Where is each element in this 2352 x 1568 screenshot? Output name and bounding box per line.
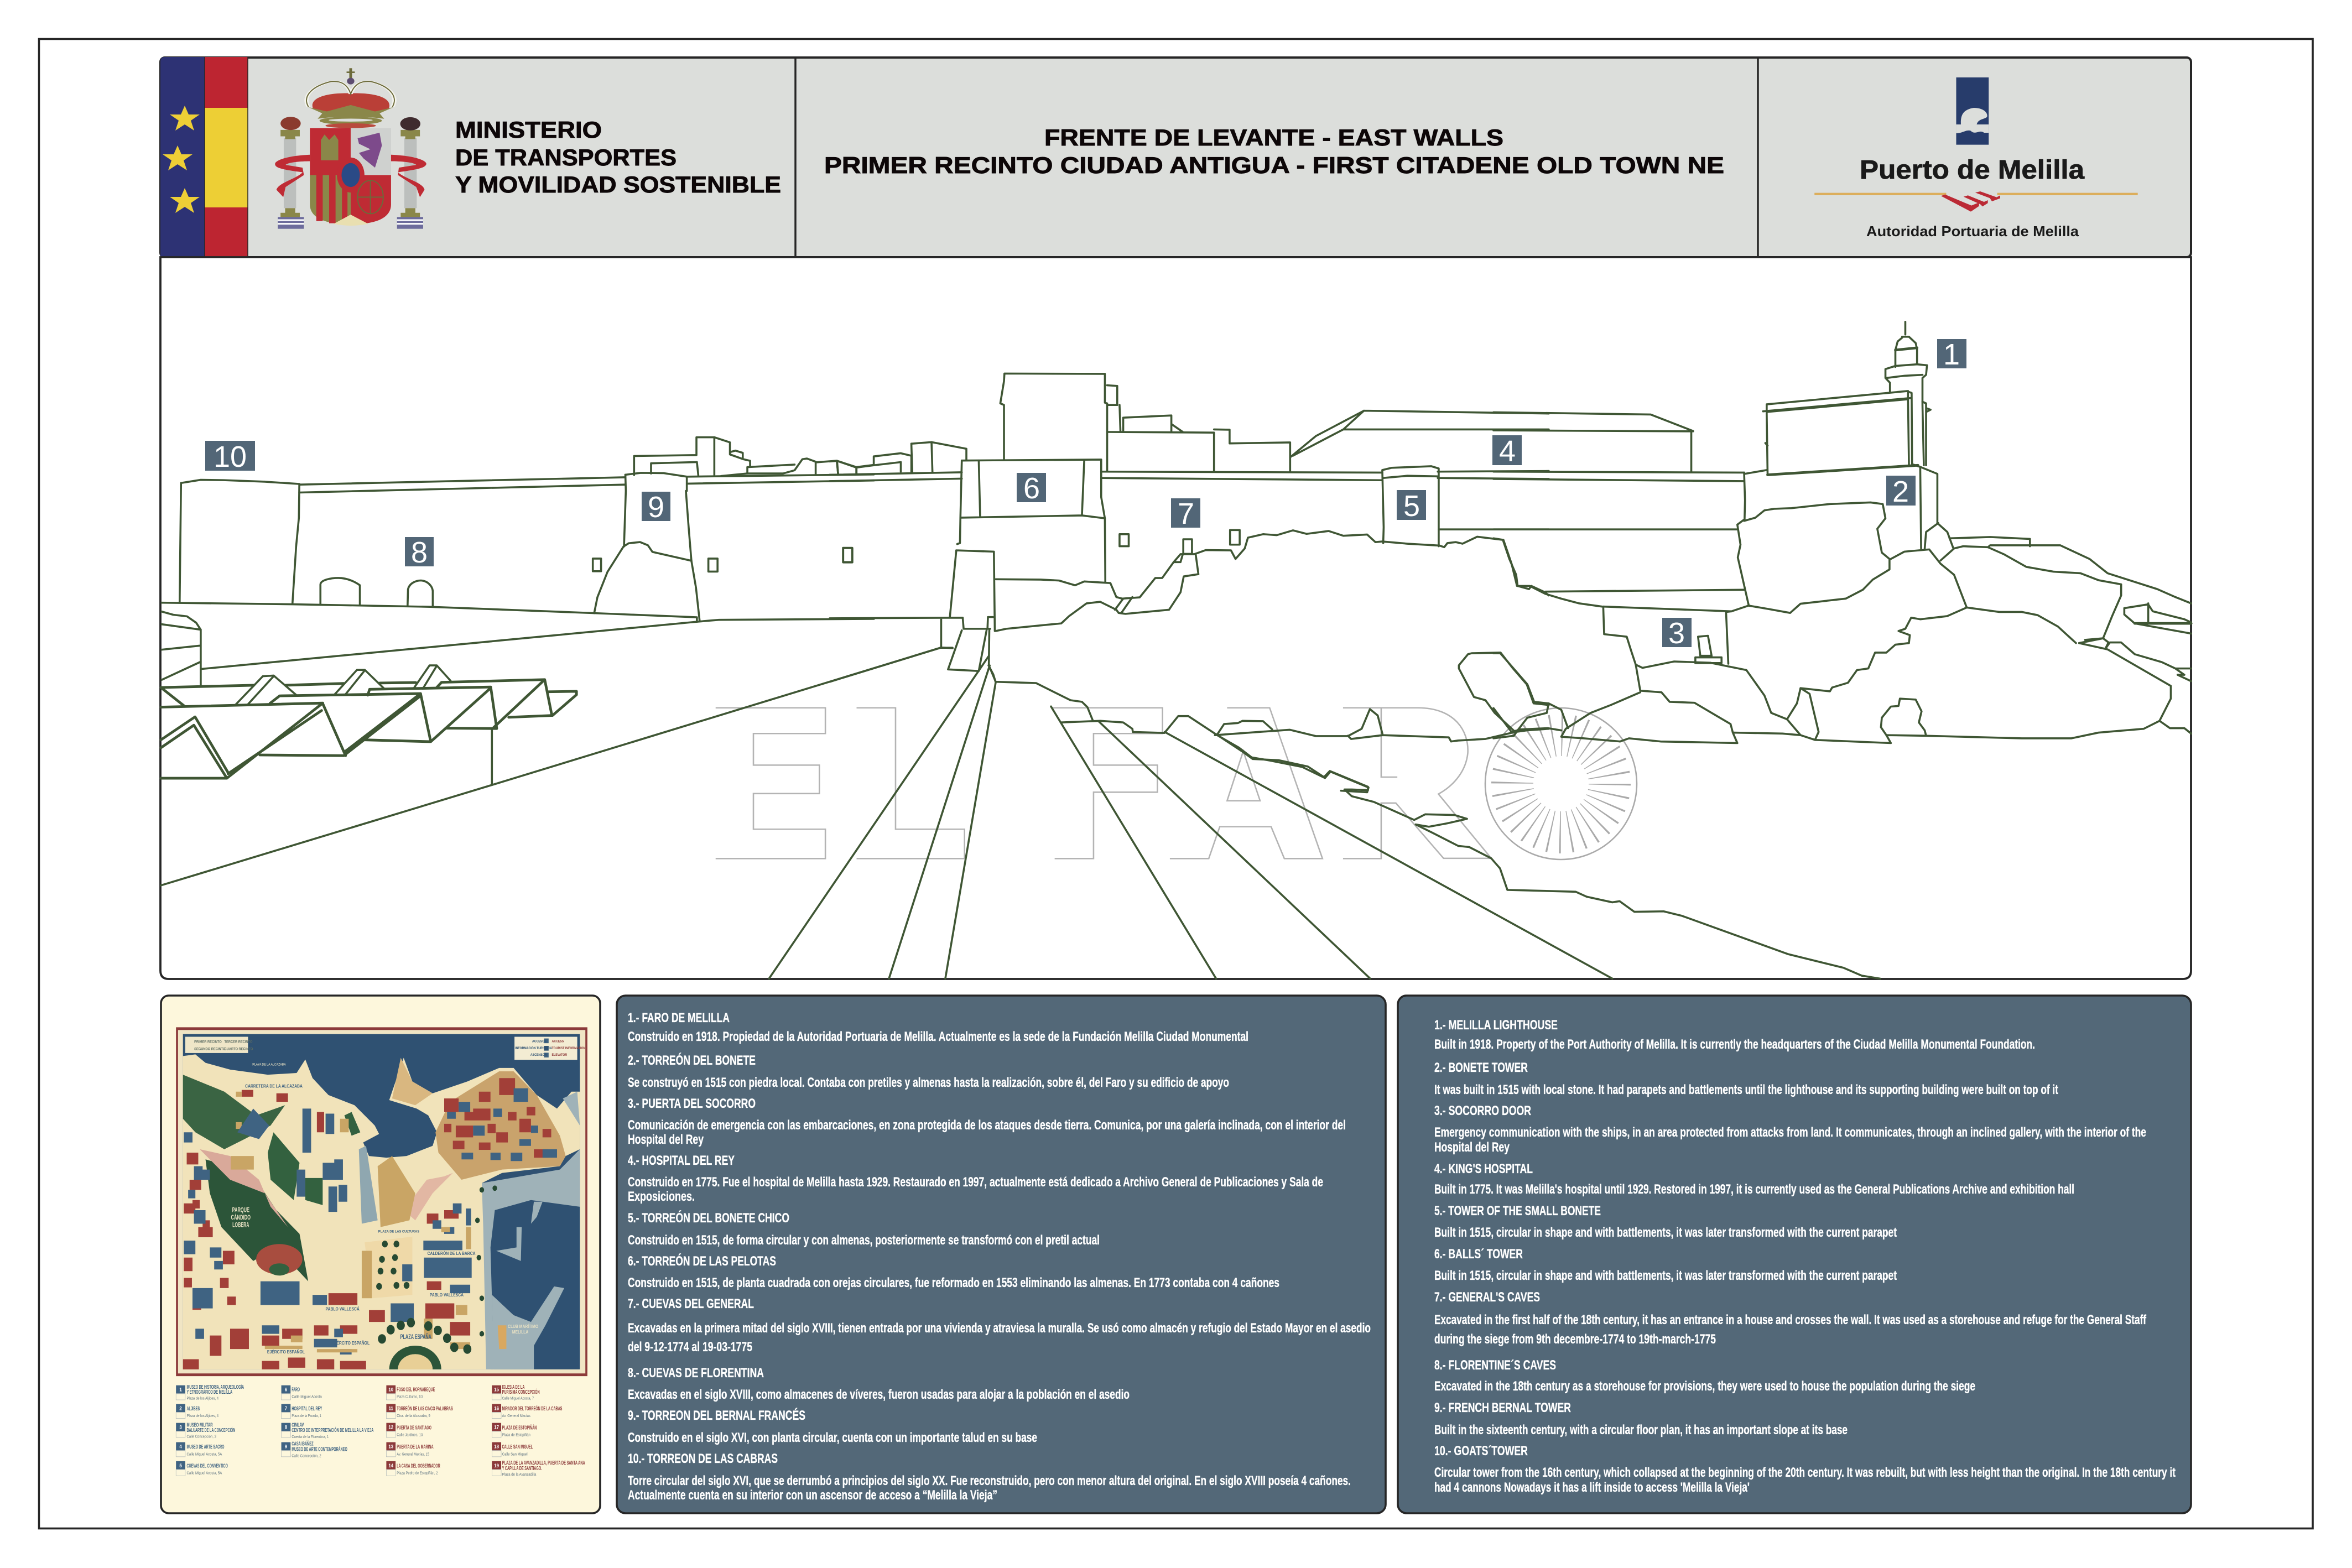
map legend: Plaza Pedro de Estopiñán, 2	[397, 1471, 438, 1476]
map illustration: EJÉRCITO ESPAÑOL	[332, 1341, 370, 1346]
number badge 6: 6	[1023, 472, 1040, 505]
panel: Spanish descriptions: 4.- HOSPITAL DEL REY	[628, 1153, 735, 1168]
map legend: PUERTA DE LA MARINA	[397, 1444, 434, 1450]
map legend: 19	[494, 1462, 499, 1468]
map legend: Plaza de la Avanzadilla	[502, 1473, 536, 1477]
panel: English descriptions: Built in 1515, circular in shape and with battlements, it was later transformed with the current parapet	[1434, 1268, 1897, 1283]
map legend: 13	[388, 1444, 393, 1450]
number badge 4: 4	[1499, 435, 1516, 468]
panel: Spanish descriptions: Construido en el siglo XVI, con planta circular, cuenta con un importante talud en su base	[628, 1430, 1037, 1445]
map legend: Cuesta de la Florentina, 1	[292, 1435, 329, 1439]
map illustration: CLUB MARÍTIMO	[508, 1324, 538, 1329]
number badge 10: 10	[214, 440, 247, 473]
panel: English descriptions: Built in 1515, circular in shape and with battlements, it was later transformed with the current parapet	[1434, 1225, 1897, 1240]
drawing: diverging lines and coast at right foreground	[1051, 706, 1880, 978]
logo: Puerto de Melilla: Autoridad Portuaria de Melilla	[1866, 223, 2079, 239]
panel: Spanish descriptions: 2.- TORREÓN DEL BONETE	[628, 1053, 756, 1068]
panel: Spanish descriptions: Excavadas en la primera mitad del siglo XVIII, tienen entrada por una vivienda y atraviesa la muralla. Se usó como almacén y refugio del Estado Mayor en el asedio	[628, 1321, 1371, 1336]
map illustration: LOBERA	[232, 1222, 249, 1229]
number badge 5: 5	[1403, 489, 1420, 523]
number badge 7	[1171, 497, 1200, 530]
map legend: PLAZA DE LA AVANZADILLA, PUERTA DE SANTA ANA	[502, 1460, 585, 1466]
map illustration: PRIMER RECINTO	[194, 1040, 222, 1044]
map legend: IGLESIA DE LA	[502, 1384, 525, 1390]
panel: English descriptions: Excavated in the 18th century as a storehouse for provisions, they were used to house the population during the siege	[1434, 1379, 1975, 1394]
map legend: FOSO DEL HORNABEQUE	[397, 1387, 435, 1393]
panel: Spanish descriptions: Excavadas en el siglo XVIII, como almacenes de víveres, fueron usadas para alojar a la población en el asedio	[628, 1387, 1130, 1402]
number badge 9	[642, 491, 670, 524]
map legend: Plaza de los Aljibes, 4	[187, 1414, 218, 1418]
panel: English descriptions: It was built in 1515 with local stone. It had parapets and battlements until the lighthouse and its supporting building were built on top of it	[1434, 1082, 2058, 1097]
map legend: 4	[179, 1444, 182, 1450]
map legend: MUSEO DE ARTE SACRO	[187, 1444, 225, 1450]
map legend: MIRADOR DEL TORREÓN DE LA CABAS	[502, 1405, 562, 1411]
panel: English descriptions: Built in the sixteenth century, with a circular floor plan, it has an important slope at its base	[1434, 1423, 1848, 1437]
panel: Spanish descriptions: Construido en 1515, de forma circular y con almenas, posteriormente se transformó con el pretil actual	[628, 1233, 1100, 1248]
panel: English descriptions: 8.- FLORENTINE´S CAVES	[1434, 1358, 1556, 1373]
panel: English descriptions: during the siege from 9th decembre-1774 to 19th-march-1775	[1434, 1332, 1716, 1347]
flag: blue band with stars	[160, 57, 205, 257]
map legend: Y ETNOGRÁFICO DE MELILLA	[187, 1389, 232, 1395]
panel: Spanish descriptions: 1.- FARO DE MELILLA	[628, 1010, 730, 1025]
map legend: Calle Concepción, 2	[292, 1454, 321, 1458]
map illustration: ELEVATOR	[552, 1054, 567, 1057]
panel: Spanish descriptions: Construido en 1918. Propiedad de la Autoridad Portuaria de Melilla. Actualmente es la sede de la Fundación Melilla Ciudad Monumental	[628, 1029, 1248, 1044]
map legend: 15	[494, 1387, 499, 1393]
map legend: Ctra. de la Alcazaba, 9	[397, 1414, 430, 1418]
flag: Spanish colours	[205, 57, 248, 257]
map illustration: TOURIST INFORMATION	[552, 1047, 585, 1050]
drawing: lighthouse, tower 2, rocks and socorro door	[1494, 322, 2191, 743]
panel: English descriptions: Built in 1775. It was Melilla's hospital until 1929. Restored in 1997, it is currently used as the General Publications Archive and exhibition hall	[1434, 1182, 2074, 1197]
map illustration: PABLO VALLESCÁ	[326, 1306, 360, 1311]
panel: Spanish descriptions: Exposiciones.	[628, 1189, 695, 1204]
number badge 3: 3	[1668, 617, 1685, 650]
panel: Spanish descriptions	[617, 996, 1386, 1513]
map illustration: PABLO VALLESCÁ	[430, 1293, 464, 1298]
panel: English descriptions: 2.- BONETE TOWER	[1434, 1060, 1528, 1075]
panel: Spanish descriptions: 7.- CUEVAS DEL GENERAL	[628, 1296, 754, 1311]
title: PRIMER RECINTO CIUDAD ANTIGUA - FIRST CITADENE OLD TOWN NE	[824, 152, 1724, 178]
number badge 1: 1	[1943, 338, 1960, 371]
map legend: LA CASA DEL GOBERNADOR	[397, 1463, 440, 1469]
number badge 2	[1886, 475, 1916, 508]
panel: English descriptions: 5.- TOWER OF THE SMALL BONETE	[1434, 1204, 1601, 1218]
map illustration: PLAZA DE LAS CULTURAS	[378, 1230, 419, 1234]
map illustration: PLAZA ESPAÑA	[400, 1333, 431, 1341]
map legend: 8	[285, 1424, 287, 1430]
map legend: BALUARTE DE LA CONCEPCIÓN	[187, 1427, 235, 1433]
map legend: MUSEO DE HISTORIA, ARQUEOLOGÍA	[187, 1384, 244, 1390]
map legend: Calle Miguel Acosta, 5A	[187, 1452, 222, 1457]
icon: coat of arms of Spain	[275, 68, 426, 229]
map legend: 3	[179, 1424, 182, 1430]
map legend: Calle Miguel Acosta	[292, 1395, 322, 1399]
map illustration: TERCER RECINTO	[225, 1040, 253, 1044]
map illustration: EJÉRCITO ESPAÑOL	[267, 1350, 305, 1355]
map legend: PUERTA DE SANTIAGO	[397, 1425, 431, 1430]
map legend: Y CAPILLA DE SANTIAGO.	[502, 1465, 542, 1471]
map legend: 14	[388, 1462, 393, 1468]
text: ministry name: DE TRANSPORTES	[455, 144, 677, 170]
map legend: Calle Miguel Acosta, 5A	[187, 1471, 222, 1476]
map legend: PLAZA DE ESTOPIÑÁN	[502, 1425, 537, 1430]
panel: English descriptions: 1.- MELILLA LIGHTHOUSE	[1434, 1018, 1558, 1033]
map legend: TORREÓN DE LAS CINCO PALABRAS	[397, 1405, 453, 1411]
panel: Spanish descriptions: 5.- TORREÓN DEL BONETE CHICO	[628, 1210, 789, 1226]
map illustration: PLAYA DE LA ALCAZABA	[252, 1063, 286, 1067]
map legend: 5	[179, 1462, 182, 1468]
panel: English descriptions: had 4 cannons Nowadays it has a lift inside to access 'Melilla la Vieja'	[1434, 1480, 1750, 1495]
text: ministry name: MINISTERIO	[455, 117, 602, 143]
map legend: 18	[494, 1444, 499, 1450]
map legend: Calle Miguel Acosta, 7	[502, 1397, 534, 1401]
map illustration: MELILLA	[512, 1329, 529, 1335]
panel: English descriptions: 3.- SOCORRO DOOR	[1434, 1103, 1531, 1118]
map illustration: CUARTO RECINTO	[225, 1047, 253, 1051]
map legend: HOSPITAL DEL REY	[292, 1405, 322, 1411]
panel: Spanish descriptions: Actualmente cuenta en su interior con un ascensor de acceso a “Melilla la Vieja”	[628, 1488, 997, 1503]
map legend: Av. General Macías, 15	[397, 1452, 429, 1457]
map legend: CIMLAV	[292, 1422, 304, 1428]
panel: tourist map	[161, 996, 600, 1513]
panel: Spanish descriptions: 3.- PUERTA DEL SOCORRO	[628, 1096, 756, 1111]
map legend: 17	[494, 1424, 499, 1430]
map illustration: ASCENSOR	[530, 1054, 547, 1057]
map legend: MUSEO DE ARTE CONTEMPORÁNEO	[292, 1446, 347, 1452]
map legend: Plaza de la Parada, 1	[292, 1414, 321, 1418]
panel: English descriptions: 7.- GENERAL'S CAVES	[1434, 1290, 1540, 1305]
map legend: Calle Concepción, 3	[187, 1435, 216, 1439]
panel: header band	[160, 57, 2191, 257]
number badge 3	[1662, 617, 1692, 650]
map legend: PURÍSIMA CONCEPCIÓN	[502, 1388, 540, 1395]
map legend: Av. General Macías	[502, 1414, 530, 1418]
drawing: zigzag roofs and road at left foreground	[161, 648, 996, 978]
map legend: 11	[389, 1405, 393, 1411]
panel: English descriptions: Built in 1918. Property of the Port Authority of Melilla. It is currently the headquarters of the Ciudad Melilla Monumental Foundation.	[1434, 1037, 2035, 1052]
map illustration: PARQUE	[232, 1207, 249, 1214]
map legend: Calle San Miguel	[502, 1452, 528, 1457]
map legend	[176, 1384, 585, 1477]
drawing: central walls, tower 6, hospital and tower 5	[830, 373, 1549, 792]
map illustration: CÁNDIDO	[231, 1213, 251, 1221]
text: ministry name	[455, 117, 781, 197]
map legend: CUEVAS DEL CONVENTICO	[187, 1463, 228, 1469]
map illustration: ACCESS	[552, 1040, 564, 1043]
map legend: 2	[179, 1405, 182, 1411]
map legend: 6	[285, 1387, 287, 1393]
panel: English descriptions	[1398, 996, 2191, 1513]
map legend: Calle Jardines, 13	[397, 1433, 423, 1437]
panel: English descriptions: 10.- GOATS´TOWER	[1434, 1444, 1528, 1458]
map illustration: SEGUNDO RECINTO	[194, 1047, 226, 1051]
map legend: MUSEO MILITAR	[187, 1422, 213, 1428]
map legend: 16	[494, 1405, 499, 1411]
panel: English descriptions: 6.- BALLS´ TOWER	[1434, 1247, 1523, 1262]
number badge 7: 7	[1178, 497, 1194, 530]
number badge 9: 9	[648, 491, 664, 524]
panel: Spanish descriptions: Se construyó en 1515 con piedra local. Contaba con pretiles y almenas hasta la realización, sobre él, del Faro y su edificio de apoyo	[628, 1075, 1229, 1090]
number badge 2: 2	[1892, 475, 1909, 508]
panel: Spanish descriptions: Hospital del Rey	[628, 1132, 704, 1147]
map illustration: CARRETERA DE LA ALCAZABA	[245, 1083, 303, 1089]
text: ministry name: Y MOVILIDAD SOSTENIBLE	[455, 171, 781, 197]
panel: English descriptions: 9.- FRENCH BERNAL TOWER	[1434, 1400, 1571, 1415]
panel: Spanish descriptions: Torre circular del siglo XVI, que se derrumbó a principios del siglo XX. Fue reconstruido, pero con menor altura del original. En el siglo XVIII poseía 4 cañones.	[628, 1473, 1351, 1488]
number badge 8	[405, 536, 434, 569]
map legend: Plaza de los Aljibes, 4	[187, 1397, 218, 1401]
panel: English descriptions: Hospital del Rey	[1434, 1140, 1510, 1155]
number badge 6	[1017, 472, 1046, 505]
panel: Spanish descriptions: 8.- CUEVAS DE FLORENTINA	[628, 1366, 764, 1381]
title	[824, 124, 1724, 178]
map legend: 1	[179, 1387, 182, 1393]
map legend: ALJIBES	[187, 1405, 200, 1411]
number badge 8: 8	[411, 536, 428, 569]
map legend: 9	[285, 1444, 287, 1450]
panel: Spanish descriptions: del 9-12-1774 al 19-03-1775	[628, 1340, 752, 1355]
map legend: 12	[388, 1424, 393, 1430]
map illustration: CALDERÓN DE LA BARCA	[428, 1251, 476, 1256]
map legend: 10	[388, 1387, 393, 1393]
map legend: Plaza Culturas, 1D	[397, 1395, 423, 1399]
panel: Spanish descriptions: 6.- TORREÓN DE LAS PELOTAS	[628, 1253, 776, 1269]
panel: Spanish descriptions: 9.- TORREON DEL BERNAL FRANCÉS	[628, 1408, 805, 1423]
watermark: EL FARO	[716, 708, 1637, 859]
number badge 10	[205, 440, 255, 473]
number badge 5	[1397, 489, 1426, 523]
map illustration	[176, 1027, 587, 1376]
number badge 1	[1937, 338, 1966, 371]
map legend: CALLE SAN MIGUEL	[502, 1444, 533, 1450]
panel: Spanish descriptions: Construido en 1775. Fue el hospital de Melilla hasta 1929. Restaurado en 1997, actualmente está dedicado a Archivo General de Publicaciones y Sala de	[628, 1175, 1323, 1190]
logo: Puerto de Melilla: Puerto de Melilla	[1860, 155, 2084, 185]
number badge 4	[1492, 435, 1522, 468]
map legend: 7	[285, 1405, 287, 1411]
map legend: FARO	[292, 1387, 300, 1393]
logo: Puerto de Melilla	[1814, 77, 2138, 239]
map illustration: ACCESOS	[532, 1040, 547, 1043]
map legend: CENTRO DE INTERPRETACIÓN DE MELILLA LA VIEJA	[292, 1427, 374, 1433]
panel: Spanish descriptions: Comunicación de emergencia con las embarcaciones, en zona protegida de los ataques desde tierra. Comunica, por una galería inclinada, con el interior del	[628, 1118, 1346, 1133]
drawing: western walls, tower 10, tower 9 and roofs	[162, 437, 874, 686]
panel: English descriptions: 4.- KING'S HOSPITAL	[1434, 1161, 1533, 1176]
map legend: Plaza de Estopiñán	[502, 1433, 530, 1437]
panel: Spanish descriptions: 10.- TORREON DE LAS CABRAS	[628, 1451, 778, 1466]
map illustration: INFORMACIÓN TURÍSTICA	[515, 1046, 552, 1050]
map legend: CASA IBÁÑEZ	[292, 1441, 314, 1447]
panel: Spanish descriptions: Construido en 1515, de planta cuadrada con orejas circulares, fue reformado en 1553 eliminando las almenas. En 1773 contaba con 4 cañones	[628, 1275, 1279, 1290]
panel: drawing of the east walls	[160, 257, 2191, 979]
title: FRENTE DE LEVANTE - EAST WALLS	[1044, 124, 1503, 150]
